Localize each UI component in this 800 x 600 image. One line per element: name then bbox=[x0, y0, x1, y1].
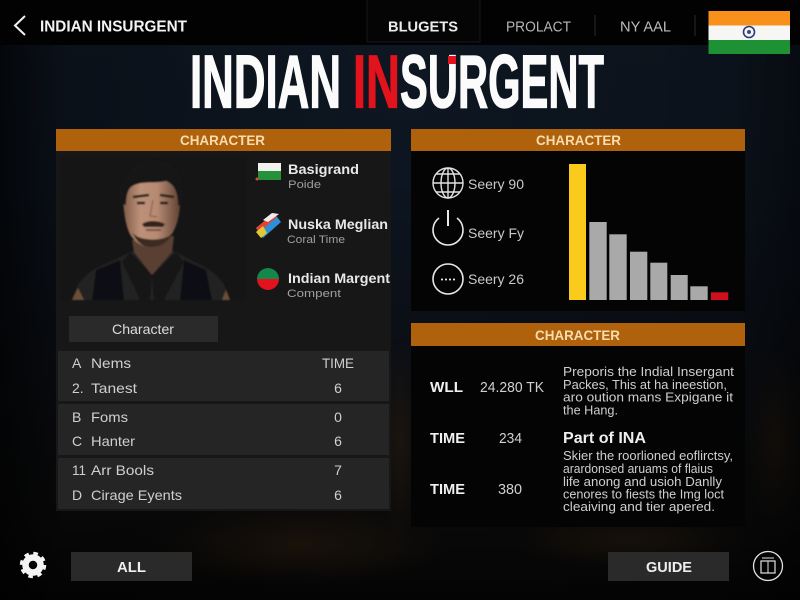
intro paragraph bbox=[563, 364, 734, 418]
icon: dots bbox=[433, 264, 463, 294]
table: names and times: 6 bbox=[334, 487, 342, 503]
title: IN bbox=[353, 40, 400, 124]
subheading: Part of INA bbox=[563, 430, 646, 447]
table: names and times: Arr Bools bbox=[91, 462, 154, 478]
button: guide bbox=[608, 552, 729, 581]
table: names and times: D bbox=[72, 487, 82, 503]
table: names and times: Foms bbox=[91, 409, 128, 425]
panel header: CHARACTER bbox=[535, 327, 620, 343]
table: names and times: TIME bbox=[322, 355, 354, 371]
active tab: BLUGETS bbox=[388, 18, 458, 36]
stat: wll: 24.280 TK bbox=[480, 379, 544, 396]
table: names and times: B bbox=[72, 409, 81, 425]
stat: wll bbox=[430, 379, 544, 396]
panel header bbox=[411, 323, 745, 346]
table: names and times: C bbox=[72, 433, 82, 449]
icon: indian flag bbox=[708, 11, 790, 54]
list item: indian margent: Compent bbox=[287, 288, 341, 300]
detail paragraph: life anong and usioh Danlly bbox=[563, 474, 723, 489]
character button bbox=[69, 316, 218, 342]
icon: back chevron bbox=[15, 16, 25, 35]
list item: indian margent: Indian Margent bbox=[288, 270, 390, 286]
series label 1: Seery 90 bbox=[468, 176, 524, 192]
list item: basigrand: Basigrand bbox=[288, 161, 359, 177]
panel: character profile bbox=[56, 129, 391, 511]
app name: INDIAN INSURGENT bbox=[40, 18, 188, 36]
panel: series chart bbox=[411, 129, 745, 311]
table: names and times bbox=[58, 351, 389, 509]
bar chart bbox=[569, 164, 728, 300]
icon: globe bbox=[433, 168, 463, 198]
series label 2: Seery Fy bbox=[468, 225, 524, 241]
table: names and times: 0 bbox=[334, 409, 342, 425]
table: names and times: 11 bbox=[72, 462, 86, 478]
table: names and times: Nems bbox=[91, 355, 131, 371]
intro paragraph: Packes, This at ha ineestion, bbox=[563, 377, 727, 392]
table: names and times: 6 bbox=[334, 433, 342, 449]
list item: nuska meglian: Nuska Meglian bbox=[288, 216, 388, 232]
title: SURGENT bbox=[400, 40, 604, 124]
stat: time one bbox=[430, 430, 522, 447]
stat: time two bbox=[430, 481, 522, 498]
tab: prolact: PROLACT bbox=[506, 18, 571, 36]
title bbox=[190, 40, 604, 124]
list item: nuska meglian bbox=[256, 213, 388, 246]
button: guide: GUIDE bbox=[646, 560, 692, 576]
table: names and times: A bbox=[72, 355, 82, 371]
table: names and times: Cirage Eyents bbox=[91, 487, 182, 503]
character portrait bbox=[60, 157, 246, 300]
list item: basigrand: Poide bbox=[288, 179, 321, 191]
table: names and times: 2. bbox=[72, 380, 84, 396]
stat: time one: 234 bbox=[499, 430, 522, 447]
detail paragraph: cenores to fiests the Img loct bbox=[563, 486, 724, 502]
panel header bbox=[411, 129, 745, 151]
icon: power bbox=[433, 210, 463, 245]
icon: settings gear bbox=[22, 554, 44, 576]
detail paragraph: arardonsed aruams of flaius bbox=[563, 461, 713, 476]
panel: stats and description bbox=[411, 323, 745, 527]
panel header bbox=[56, 129, 391, 151]
tab: ny aal: NY AAL bbox=[620, 18, 671, 36]
detail paragraph: cleaiving and tier apered. bbox=[563, 499, 715, 514]
list item: indian margent bbox=[257, 268, 390, 300]
top navigation bar bbox=[0, 0, 800, 45]
button: all bbox=[71, 552, 192, 581]
icon: guide book bbox=[754, 552, 782, 580]
list item: basigrand bbox=[256, 161, 359, 191]
list item: nuska meglian: Coral Time bbox=[287, 234, 345, 246]
stat: time one: TIME bbox=[430, 430, 465, 447]
intro paragraph: Preporis the Indial Insergant bbox=[563, 364, 734, 379]
detail paragraph: Skier the roorlioned eoflirctsy, bbox=[563, 448, 733, 463]
intro paragraph: aro oution mans Expigane it bbox=[563, 390, 733, 404]
stat: wll: WLL bbox=[430, 379, 463, 396]
title: INDIAN bbox=[190, 40, 341, 124]
button: all: ALL bbox=[117, 560, 146, 576]
table: names and times: Tanest bbox=[91, 380, 137, 396]
table: names and times: 6 bbox=[334, 380, 342, 396]
stat: time two: 380 bbox=[498, 481, 522, 498]
table: names and times: 7 bbox=[334, 462, 342, 478]
detail paragraph bbox=[563, 448, 733, 514]
character button: Character bbox=[112, 321, 174, 337]
panel header: CHARACTER bbox=[180, 132, 265, 148]
active tab bbox=[367, 0, 480, 42]
intro paragraph: the Hang. bbox=[563, 402, 618, 418]
stat: time two: TIME bbox=[430, 481, 465, 498]
series label 3: Seery 26 bbox=[468, 271, 524, 287]
panel header: CHARACTER bbox=[536, 132, 621, 148]
table: names and times: Hanter bbox=[91, 433, 135, 449]
